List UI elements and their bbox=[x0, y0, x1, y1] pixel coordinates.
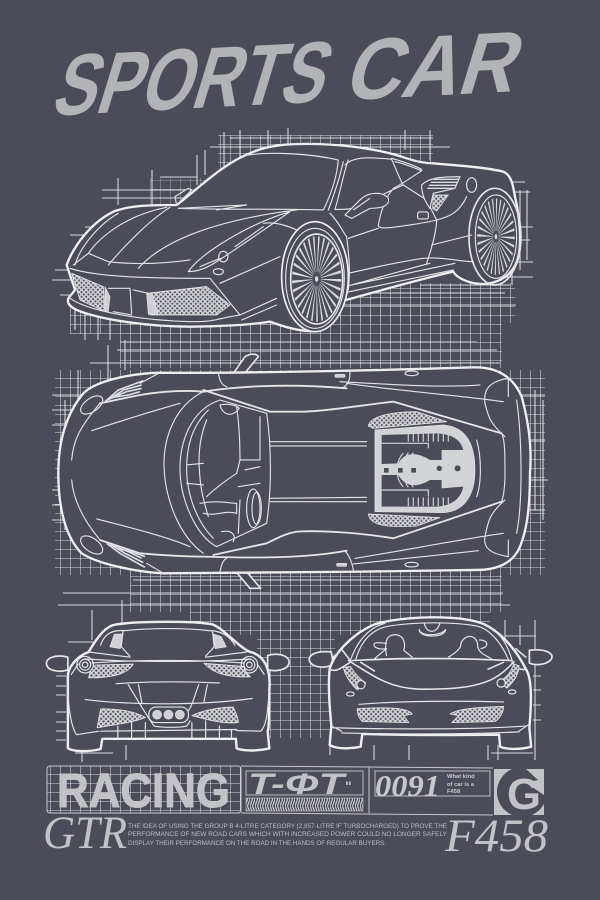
body outline bbox=[329, 617, 531, 749]
windshield bbox=[350, 623, 512, 661]
G emblem: G bbox=[507, 770, 541, 819]
rear wheel bbox=[469, 188, 521, 285]
number block: 0091 bbox=[375, 768, 440, 803]
body outline bbox=[58, 367, 531, 573]
description text bbox=[128, 823, 448, 847]
number block: F458 bbox=[447, 789, 461, 795]
rear-view mirror bbox=[419, 623, 446, 636]
blueprint grid background bbox=[52, 128, 548, 762]
glass and body lines bbox=[70, 153, 473, 322]
side vent bbox=[422, 177, 460, 208]
rear view car illustration bbox=[46, 622, 289, 751]
lower mesh panels bbox=[97, 709, 145, 728]
logo block: T-ΦT bbox=[248, 768, 348, 801]
body outline bbox=[67, 144, 520, 331]
upper mesh panels bbox=[89, 664, 133, 678]
logo block: " bbox=[345, 778, 352, 794]
body outline bbox=[68, 622, 270, 751]
mirrors bbox=[309, 650, 552, 667]
diffuser lines bbox=[67, 676, 269, 738]
bottom graphics strip bbox=[43, 765, 548, 862]
GTR wordmark: GTR bbox=[43, 807, 127, 859]
number block bbox=[375, 768, 490, 803]
exhausts bbox=[149, 707, 188, 723]
fuel cap and door handle bbox=[467, 178, 477, 192]
front grille bbox=[331, 701, 530, 734]
side intakes bbox=[105, 381, 145, 567]
rear quarter glass bbox=[110, 634, 123, 649]
front view car illustration bbox=[309, 617, 552, 749]
engine cover bbox=[375, 425, 475, 513]
rear window bbox=[71, 629, 264, 674]
side car illustration bbox=[67, 144, 521, 332]
description text: PERFORMANCE OF NEW ROAD CARS WHICH WITH INCREASED POWER COULD NO LONGER SAFELY bbox=[128, 831, 448, 838]
title: SPORTS bbox=[44, 23, 345, 134]
tail lights bbox=[77, 656, 258, 673]
mirrors bbox=[230, 354, 261, 588]
description text: DISPLAY THEIR PERFORMANCE ON THE ROAD IN THE HANDS OF REGULAR BUYERS. bbox=[128, 840, 386, 847]
F458 wordmark: F458 bbox=[444, 810, 548, 862]
panel lines bbox=[72, 372, 521, 573]
G emblem bbox=[494, 767, 547, 819]
headlight bbox=[188, 212, 290, 272]
wing mirror bbox=[345, 193, 389, 218]
racing badge: RACING bbox=[57, 765, 230, 818]
hood and headlights bbox=[330, 649, 526, 689]
number block: What kind bbox=[447, 774, 475, 780]
front grille mesh bbox=[72, 273, 105, 312]
top view car illustration bbox=[58, 354, 531, 588]
title: CAR bbox=[336, 13, 536, 119]
mirrors bbox=[46, 654, 289, 671]
strip frame bbox=[241, 766, 493, 815]
logo block bbox=[246, 768, 363, 811]
cabin bbox=[180, 400, 270, 547]
number block: of car is a bbox=[447, 782, 475, 788]
engine mesh panels bbox=[368, 412, 447, 428]
engine detail bbox=[382, 433, 463, 507]
description text: THE IDEA OF USING THE GROUP B 4-LITRE CATEGORY (2,857-LITRE IF TURBOCHARGED) TO PROVE THE bbox=[128, 823, 447, 830]
front wheel bbox=[282, 222, 348, 332]
seats bbox=[374, 635, 491, 659]
thick cabin and shoulder lines bbox=[100, 386, 502, 558]
